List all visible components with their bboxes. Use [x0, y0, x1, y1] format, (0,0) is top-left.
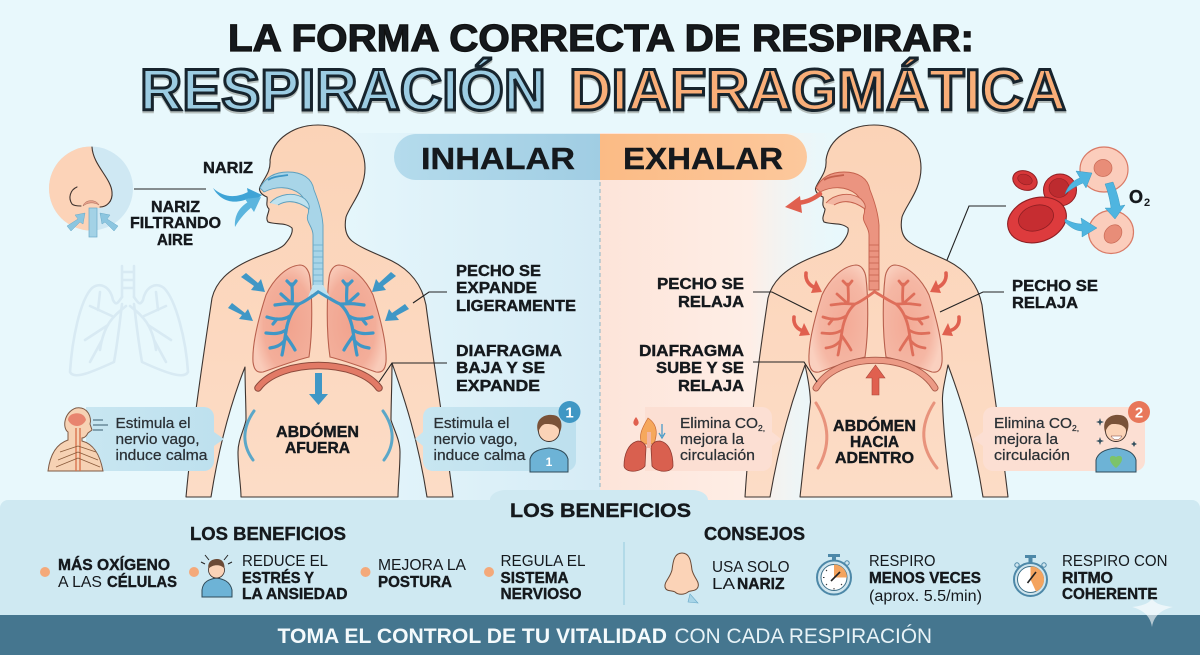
callout text: Estimula el: [116, 415, 190, 432]
label: O2: 2: [1144, 197, 1150, 209]
icon: stopwatch: [1014, 555, 1047, 596]
label: nariz filtrando aire: [130, 199, 221, 249]
benefit: reduce estres: ESTRÉS Y: [242, 570, 315, 587]
label: O2: O: [1129, 187, 1143, 207]
subheading: consejos: CONSEJOS: [704, 524, 805, 544]
callout: vagus nerve right: nervio vago,: [434, 431, 518, 448]
benefit: sistema nervioso: [484, 553, 586, 603]
label: nariz filtrando aire: NARIZ: [151, 199, 201, 216]
tip: nariz: [665, 553, 790, 603]
callout: CO2 right: 2,: [1072, 423, 1079, 433]
label: pecho se expande: EXPANDE: [456, 280, 537, 297]
label: nariz filtrando aire: FILTRANDO: [130, 215, 221, 232]
label: abdomen hacia adentro: HACIA: [850, 434, 899, 451]
icon: person number 1: [530, 415, 568, 472]
tip: ritmo coherente: RESPIRO CON: [1062, 553, 1168, 570]
callout: vagus nerve left: nervio vago,: [116, 431, 200, 448]
benefit: reduce estres: LA ANSIEDAD: [242, 586, 348, 603]
icon: stressed person: [201, 555, 232, 597]
heading pill: inhalar: INHALAR: [421, 141, 575, 176]
callout: vagus nerve right: [415, 401, 580, 472]
label: abdomen hacia adentro: ABDÓMEN: [833, 417, 916, 435]
callout: CO2 right: [973, 401, 1150, 472]
label: pecho se expande: LIGERAMENTE: [456, 298, 576, 315]
label: pecho se relaja right: RELAJA: [1012, 295, 1078, 312]
panel: exhale background: [600, 133, 850, 500]
title line 1: LA FORMA CORRECTA DE RESPIRAR:: [228, 18, 974, 60]
callout text: Estimula el: [434, 415, 510, 432]
leader lines: exhale: [753, 206, 1006, 382]
tip: menos veces: [817, 553, 982, 605]
label: abdomen afuera: ABDÓMEN: [276, 423, 359, 441]
label: abdomen afuera: [276, 423, 359, 457]
ghost lungs illustration: [70, 266, 188, 375]
lungs: [253, 265, 386, 372]
number badge 1: 1: [565, 404, 574, 422]
tip: menos veces: RESPIRO: [869, 553, 936, 570]
icon: nervous system figure: [48, 408, 108, 471]
inset: nose filtering air: [49, 146, 133, 237]
heading pill: exhalar: EXHALAR: [623, 141, 783, 176]
benefit: mas oxigeno: A LAS: [58, 574, 102, 591]
arrow: diaphragm down: [309, 373, 328, 405]
benefit: postura: [360, 557, 467, 591]
bubble: [86, 407, 224, 471]
benefit: sistema nervioso: SISTEMA: [500, 570, 568, 587]
large red cell: [1002, 190, 1072, 250]
bubble: [415, 407, 576, 471]
tip: menos veces: MENOS VECES: [869, 570, 981, 587]
arrowheads: chest relax: [799, 280, 953, 336]
benefit: sistema nervioso: NERVIOSO: [500, 586, 582, 603]
callout text: Elimina CO: [680, 415, 758, 432]
arrows: chest: [228, 272, 409, 321]
benefit: mas oxigeno: MÁS OXÍGENO: [58, 557, 170, 574]
label: diafragma sube: SUBE Y SE: [656, 360, 744, 377]
oxygen arrows: [1065, 171, 1125, 237]
abdomen arcs: [816, 403, 937, 468]
bubble: [973, 407, 1145, 471]
number badge 2: 2: [1135, 404, 1143, 422]
white cell top: [1080, 147, 1128, 192]
airway: [260, 172, 323, 290]
label: nariz: NARIZ: [203, 160, 254, 177]
callout: CO2 left: circulación: [680, 447, 755, 464]
benefit: reduce estres: [189, 553, 348, 603]
footer text regular: CON CADA RESPIRACIÓN: [674, 625, 932, 648]
label: pecho se relaja right: PECHO SE: [1012, 278, 1098, 295]
title line 2: diafragmática: DIAFRAGMÁTICA: [569, 58, 1066, 123]
label: diafragma sube: [639, 343, 744, 395]
bubble: [645, 407, 781, 471]
callout: CO2 left: 2,: [758, 423, 765, 433]
label: abdomen afuera: AFUERA: [285, 440, 350, 457]
benefit: postura: MEJORA LA: [378, 557, 467, 574]
tip: ritmo coherente: COHERENTE: [1062, 586, 1158, 603]
tip: menos veces: (aprox. 5.5/min): [869, 588, 982, 605]
label: diafragma baja: BAJA Y SE: [456, 360, 545, 377]
heading pill: inhalar: [394, 134, 600, 180]
heading pill: exhalar: [600, 134, 807, 180]
callout: CO2 left: [624, 407, 781, 471]
title line 2: respiración: RESPIRACIÓN: [140, 58, 546, 123]
title: [140, 18, 1066, 123]
small red cell: [1010, 167, 1040, 194]
benefit: reduce estres: REDUCE EL: [242, 553, 328, 570]
white cell bottom: [1088, 210, 1134, 254]
benefit: postura: POSTURA: [378, 574, 452, 591]
arrow: air leaving nose: [785, 194, 820, 213]
divider: [623, 542, 625, 605]
panel: benefits and tips: [0, 490, 1200, 620]
label: diafragma baja: DIAFRAGMA: [456, 343, 562, 360]
center divider: [599, 182, 601, 490]
figure: inhale body: [186, 125, 453, 497]
arrows: chest relax: [794, 273, 959, 331]
benefit: sistema nervioso: REGULA EL: [500, 553, 586, 570]
footer band: [0, 615, 1200, 655]
diaphragm: [258, 366, 379, 388]
icon: lungs with flame: [624, 417, 673, 471]
tip: nariz: USA SOLO: [712, 559, 790, 576]
label: diafragma baja: EXPANDE: [456, 378, 540, 395]
callout: vagus nerve left: [48, 407, 224, 471]
label: pecho se expande: PECHO SE: [456, 263, 541, 280]
callout text: Elimina CO: [994, 415, 1072, 432]
callout: vagus nerve right: induce calma: [434, 447, 526, 464]
label: pecho se relaja left: RELAJA: [678, 294, 744, 311]
label: abdomen hacia adentro: ADENTRO: [835, 450, 914, 467]
benefit: mas oxigeno: [40, 557, 177, 591]
tip: nariz: NARIZ: [737, 576, 785, 593]
callout: vagus nerve left: induce calma: [116, 447, 208, 464]
number badge 2: [1128, 401, 1150, 423]
label: diafragma baja: [456, 343, 562, 395]
sparkle: [1132, 598, 1173, 627]
label: diafragma sube: RELAJA: [678, 378, 744, 395]
tip: ritmo coherente: [1014, 553, 1168, 603]
tip: ritmo coherente: RITMO: [1062, 570, 1113, 587]
label: pecho se relaja left: PECHO SE: [657, 276, 744, 293]
illustration: blood cells and oxygen: [1002, 147, 1150, 254]
body silhouette: [186, 125, 453, 497]
icon: happy person: [1096, 415, 1137, 472]
airway: [816, 172, 879, 290]
panel: inhale background: [240, 133, 600, 500]
icon: stopwatch: [817, 554, 851, 594]
label: diafragma sube: DIAFRAGMA: [639, 343, 744, 360]
body silhouette: [745, 125, 1008, 497]
leader line: nose inset: [134, 188, 206, 190]
callout: CO2 right: mejora la: [994, 431, 1059, 448]
leader lines: inhale: [379, 292, 447, 382]
label: abdomen hacia adentro: [833, 417, 916, 467]
medium red cell: [1044, 174, 1076, 206]
label: O2: [1129, 187, 1150, 209]
arrow: diaphragm up: [866, 365, 885, 395]
diaphragm: [816, 360, 935, 388]
callout: CO2 right: circulación: [994, 447, 1070, 464]
tip: nariz: LA: [712, 576, 736, 593]
abdomen arcs: [245, 411, 392, 460]
label: pecho se relaja right: [1012, 278, 1098, 312]
number badge 1: [558, 401, 580, 423]
arrows: air entering nose: [213, 188, 262, 227]
icon: nose: [665, 553, 698, 603]
benefit: mas oxigeno: CÉLULAS: [107, 574, 177, 591]
figure: exhale body: [745, 125, 1008, 497]
label: nariz filtrando aire: AIRE: [157, 232, 193, 249]
label: pecho se expande: [456, 263, 576, 315]
callout: CO2 left: mejora la: [680, 431, 745, 448]
icon: person number 1: 1: [546, 455, 553, 469]
heading: los beneficios tab: LOS BENEFICIOS: [510, 501, 691, 522]
lungs: [809, 265, 942, 372]
footer text bold: TOMA EL CONTROL DE TU VITALIDAD: [278, 625, 667, 648]
label: pecho se relaja left: [657, 276, 744, 311]
subheading: los beneficios: LOS BENEFICIOS: [190, 524, 346, 544]
